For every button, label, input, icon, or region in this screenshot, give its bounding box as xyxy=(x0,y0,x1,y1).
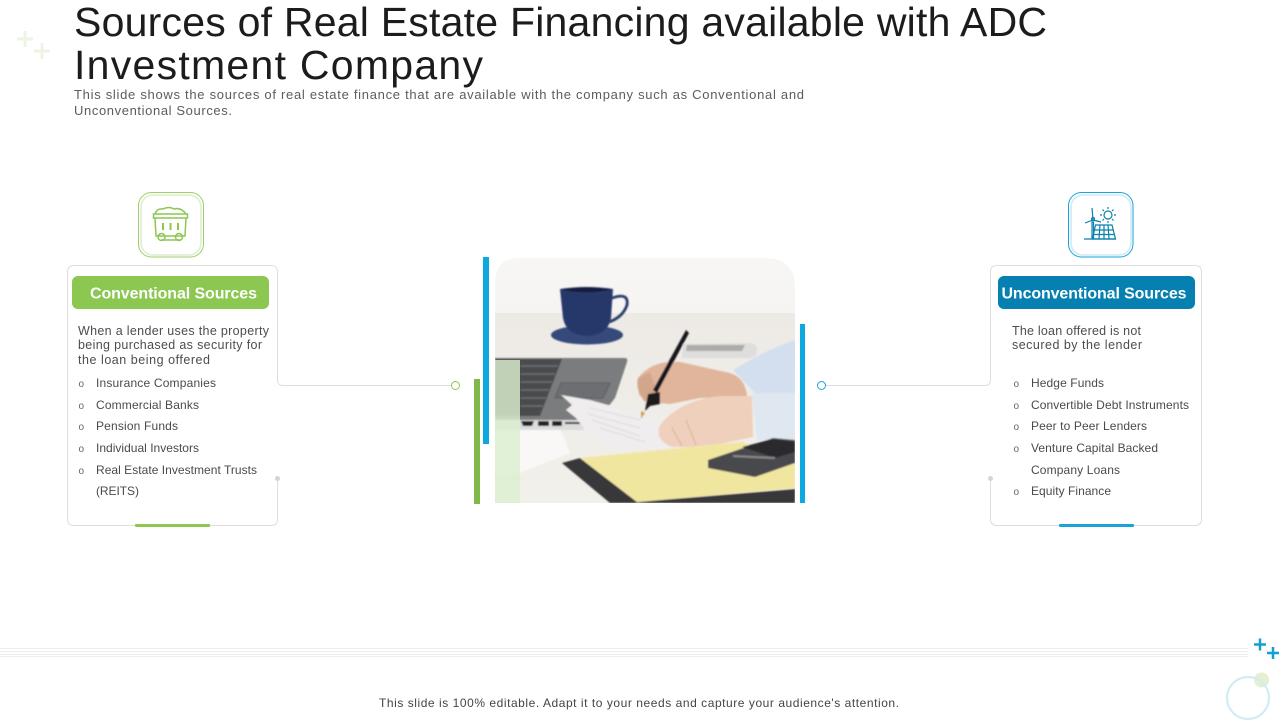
decorative circles: bottom right xyxy=(1227,672,1269,719)
card outline with connector xyxy=(68,266,451,526)
source list xyxy=(78,376,257,498)
source list: (REITS) xyxy=(96,484,139,498)
description xyxy=(1012,324,1142,352)
source list: Venture Capital Backed xyxy=(1031,441,1158,455)
description: When a lender uses the property xyxy=(78,324,270,338)
decorative plus signs: top left xyxy=(17,31,50,59)
description: The loan offered is not xyxy=(1012,324,1142,338)
source list: o xyxy=(78,379,84,390)
source list: o xyxy=(1014,487,1020,498)
accent bars around photo xyxy=(474,257,805,504)
bottom accent xyxy=(1059,524,1134,527)
header: unconventional sources: Unconventional Sources xyxy=(1002,286,1187,302)
panel: unconventional sources xyxy=(818,266,1202,527)
description: secured by the lender xyxy=(1012,338,1142,352)
panel: conventional sources xyxy=(68,266,460,527)
pale green overlay xyxy=(495,360,520,503)
source list: o xyxy=(78,466,84,477)
title xyxy=(74,0,1047,88)
folder xyxy=(562,458,795,503)
source list: o xyxy=(1014,401,1020,412)
source list: Insurance Companies xyxy=(96,376,216,390)
header: conventional sources xyxy=(72,276,269,309)
footer divider lines xyxy=(0,648,1248,656)
title: Sources of Real Estate Financing available with ADC xyxy=(74,0,1047,45)
subtitle: This slide shows the sources of real estate finance that are available with the company such as Conventional and xyxy=(74,87,804,102)
title: Investment Company xyxy=(74,42,484,88)
subtitle: Unconventional Sources. xyxy=(74,103,232,118)
source list: Equity Finance xyxy=(1031,484,1111,498)
source list: o xyxy=(78,401,84,412)
description: the loan being offered xyxy=(78,353,210,367)
subtitle xyxy=(74,87,804,118)
lower hand xyxy=(658,396,753,447)
description xyxy=(78,324,270,367)
saucer and mug xyxy=(551,326,623,344)
pen xyxy=(653,330,689,393)
phone xyxy=(682,343,757,358)
bottom accent xyxy=(135,524,210,527)
source list: Real Estate Investment Trusts xyxy=(96,463,257,477)
card outline with connector xyxy=(826,266,1202,526)
footer note: This slide is 100% editable. Adapt it to your needs and capture your audience's attention. xyxy=(379,696,899,710)
source list: Peer to Peer Lenders xyxy=(1031,419,1147,433)
yellow notepad xyxy=(580,442,795,502)
header: unconventional sources xyxy=(998,276,1195,309)
source list: Convertible Debt Instruments xyxy=(1031,398,1189,412)
writing hand xyxy=(638,362,747,404)
icon: wind turbine and solar panel (unconventional) xyxy=(1068,192,1133,257)
source list: Company Loans xyxy=(1031,463,1120,477)
writing sheet xyxy=(560,394,645,430)
source list: Commercial Banks xyxy=(96,398,199,412)
source list: Hedge Funds xyxy=(1031,376,1104,390)
source list: o xyxy=(78,444,84,455)
sleeves xyxy=(733,340,795,393)
source list xyxy=(1014,376,1189,498)
source list: Pension Funds xyxy=(96,419,178,433)
description: being purchased as security for xyxy=(78,338,262,352)
calculator xyxy=(708,438,795,477)
source list: o xyxy=(1014,379,1020,390)
icon: mine cart (conventional) xyxy=(138,192,204,257)
photo: hands writing at a desk xyxy=(495,258,795,503)
source list: o xyxy=(1014,444,1020,455)
laptop xyxy=(495,358,627,421)
source list: Individual Investors xyxy=(96,441,199,455)
source list: o xyxy=(1014,422,1020,433)
connector end dots xyxy=(818,382,993,481)
header: conventional sources: Conventional Sources xyxy=(90,286,257,302)
source list: o xyxy=(78,422,84,433)
connector end dots xyxy=(275,382,460,481)
decorative plus signs: bottom right xyxy=(1254,638,1279,659)
paper under laptop xyxy=(520,430,570,472)
